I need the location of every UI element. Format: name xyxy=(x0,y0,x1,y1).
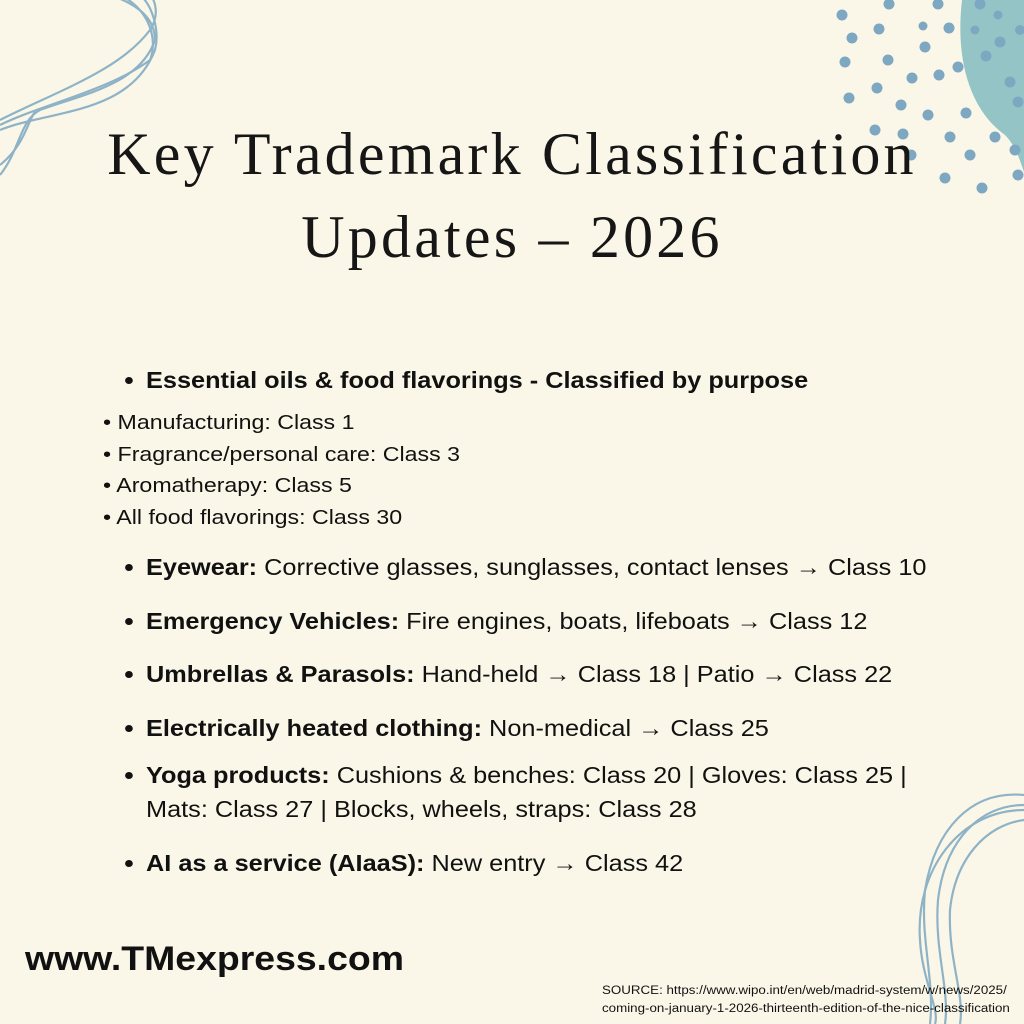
decoration: top-right blob and dots xyxy=(836,0,1024,194)
title: Key Trademark Classification xyxy=(107,121,917,187)
source: coming-on-january-1-2026-thirteenth-edition-of-the-nice-classification xyxy=(602,1003,1010,1015)
decoration: bottom-right curves xyxy=(918,794,1024,1024)
sub-items: • All food flavorings: Class 30 xyxy=(103,506,402,528)
sub-items: • Aromatherapy: Class 5 xyxy=(103,474,352,497)
item: essential oils: Essential oils & food flavorings - Classified by purpose xyxy=(146,367,808,393)
item: eyewear: Eyewear: Corrective glasses, sunglasses, contact lenses → Class 10 xyxy=(146,554,926,580)
title line 2: Updates – 2026 xyxy=(301,204,723,270)
item: emergency vehicles: Emergency Vehicles: Fire engines, boats, lifeboats → Class 12 xyxy=(146,608,867,634)
item: umbrellas: Umbrellas & Parasols: Hand-held → Class 18 | Patio → Class 22 xyxy=(146,661,892,687)
item: yoga: Yoga products: Cushions & benches: Class 20 | Gloves: Class 25 | xyxy=(146,762,907,788)
item: yoga: Mats: Class 27 | Blocks, wheels, straps: Class 28 xyxy=(146,796,697,822)
website: www.TMexpress.com xyxy=(25,940,404,978)
decoration: top-left curves xyxy=(0,0,158,176)
source: SOURCE: https://www.wipo.int/en/web/madrid-system/w/news/2025/ xyxy=(602,985,1007,997)
sub-items xyxy=(103,411,460,528)
list: classification updates xyxy=(103,367,926,876)
sub-items: • Manufacturing: Class 1 xyxy=(103,411,354,434)
sub-items: • Fragrance/personal care: Class 3 xyxy=(103,442,460,466)
item: AIaaS: AI as a service (AIaaS): New entry → Class 42 xyxy=(146,850,683,876)
item: yoga xyxy=(146,758,907,826)
item: heated clothing: Electrically heated clothing: Non-medical → Class 25 xyxy=(146,715,769,741)
source xyxy=(602,985,1010,1015)
